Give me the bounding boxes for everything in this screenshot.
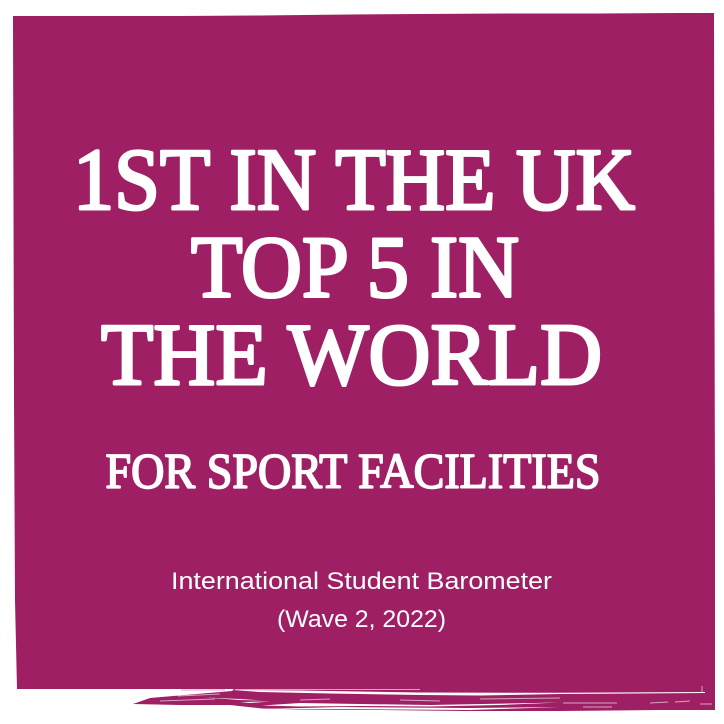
heading: main title bbox=[73, 132, 635, 404]
source name: International Student Barometer bbox=[171, 568, 552, 595]
subheading: FOR SPORT FACILITIES bbox=[106, 442, 600, 498]
title line 1: 1ST IN THE UK bbox=[73, 132, 635, 229]
source text bbox=[171, 568, 552, 633]
title line 2: TOP 5 IN bbox=[191, 220, 519, 316]
source wave: (Wave 2, 2022) bbox=[277, 606, 446, 633]
title line 3: THE WORLD bbox=[101, 307, 602, 404]
